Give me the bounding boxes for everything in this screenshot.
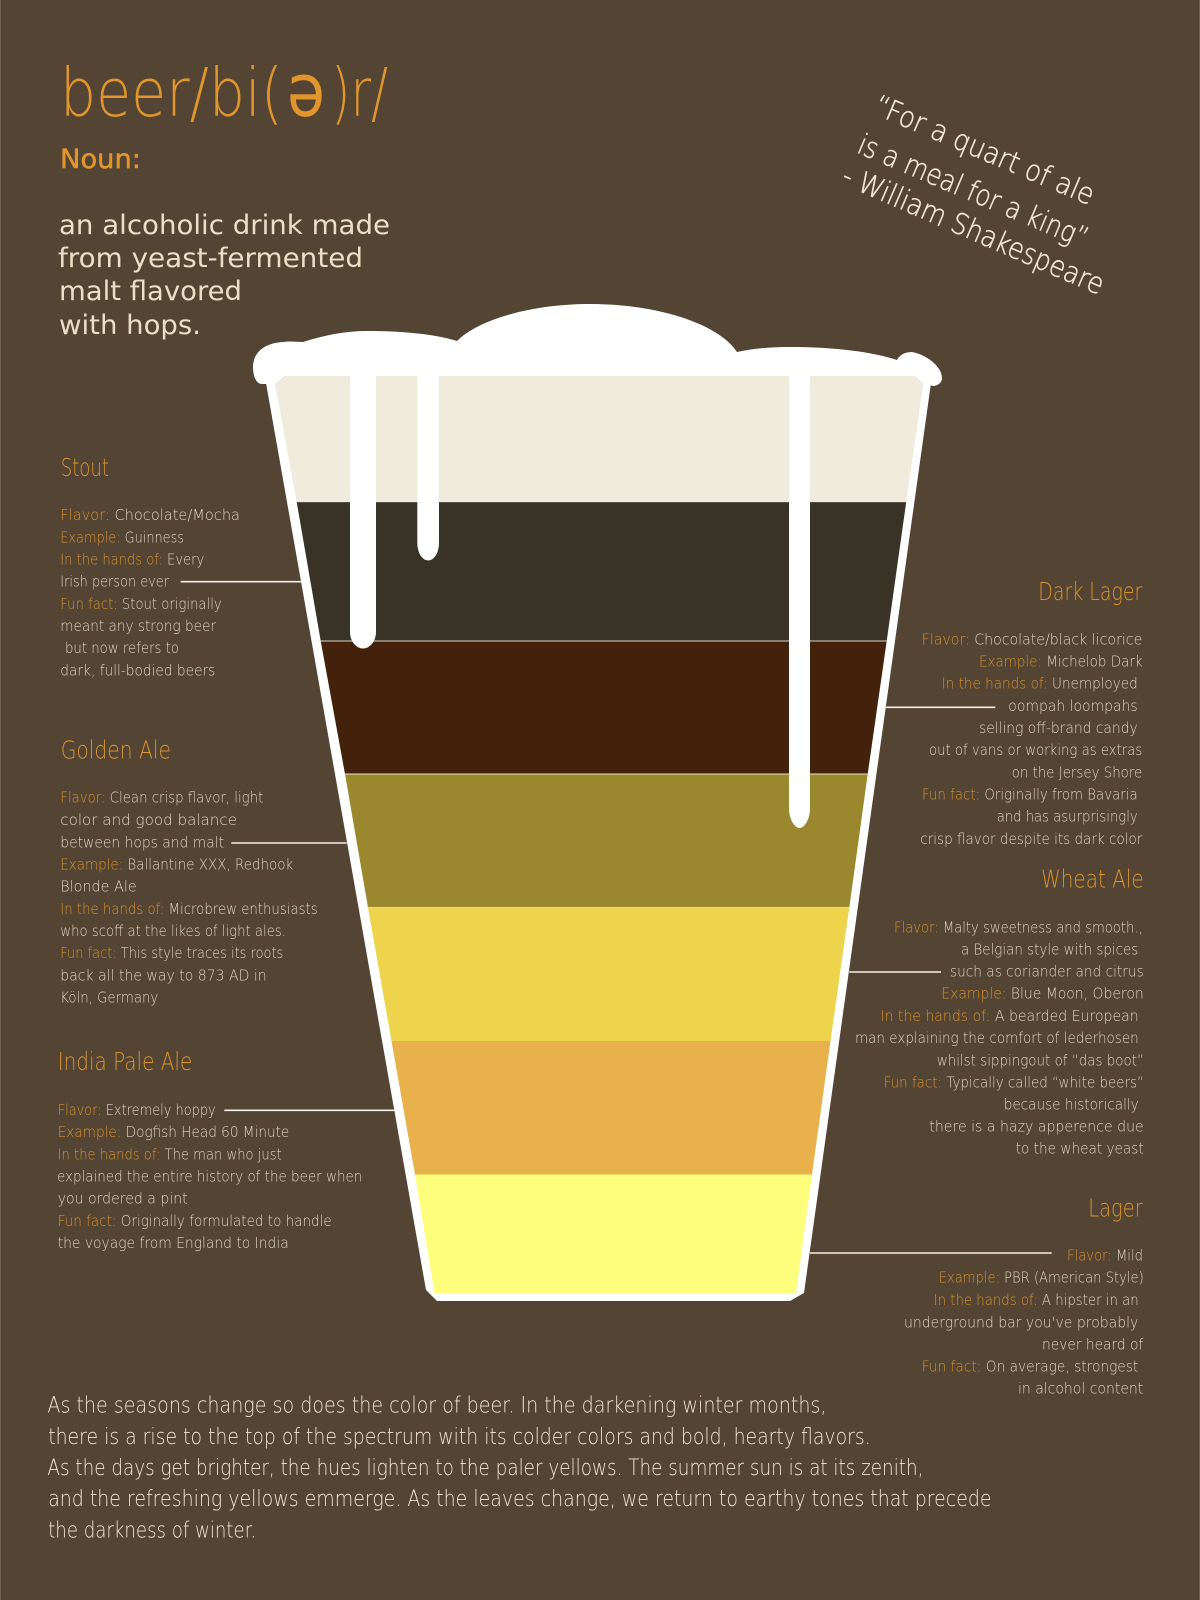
layer: dark lager	[321, 641, 887, 774]
quote: William Shakespeare: - William Shakespeare	[837, 158, 1110, 301]
text block: Dark Lager details: Flavor: Chocolate/black licorice	[922, 630, 1142, 648]
text block: Stout details: Example: Guinness	[60, 528, 184, 546]
text block: seasons paragraph: there is a rise to the top of the spectrum with its colder colors and bold, hearty flavors.	[48, 1425, 871, 1450]
text block: Wheat Ale details: Flavor: Malty sweetness and smooth.,	[894, 918, 1143, 936]
text block: Wheat Ale details: to the wheat yeast	[1016, 1140, 1144, 1158]
text block: seasons paragraph: As the days get brighter, the hues lighten to the paler yellows. The summer sun is at its zenith,	[47, 1456, 923, 1481]
text block: Golden Ale details: Fun fact: This style traces its roots	[60, 944, 283, 962]
text block: Lager details: never heard of	[1042, 1335, 1144, 1353]
panel: Wheat Ale	[849, 865, 1144, 1158]
title: beer pronunciation: beer/bi(	[60, 54, 283, 132]
text block: Wheat Ale details: man explaining the comfort of lederhosen	[855, 1029, 1139, 1047]
heading: Wheat Ale: Wheat Ale	[1041, 865, 1144, 894]
text block: Golden Ale details: Flavor: Clean crisp flavor, light	[60, 789, 263, 807]
leader line: Golden Ale	[231, 842, 347, 844]
text block: definition	[58, 210, 390, 341]
text block: Lager details: Fun fact: On average, strongest	[922, 1357, 1138, 1375]
title: beer pronunciation: )r/	[331, 54, 388, 132]
text block: seasons paragraph: the darkness of winter.	[48, 1518, 256, 1543]
text block: Stout details: dark, full-bodied beers	[60, 662, 215, 680]
heading: Dark Lager: Dark Lager	[1038, 577, 1143, 606]
glass outline	[266, 383, 931, 1301]
text block: Wheat Ale details: there is a hazy apperence due	[929, 1118, 1144, 1136]
text block: definition: an alcoholic drink made	[59, 210, 390, 241]
panel: Golden Ale	[60, 735, 347, 1006]
layer: lager	[415, 1174, 812, 1293]
foam head	[253, 304, 942, 386]
quote: William Shakespeare	[837, 88, 1110, 301]
quote: William Shakespeare: is a meal for a king”	[853, 127, 1094, 255]
panel: India Pale Ale	[57, 1047, 395, 1252]
text block: definition: from yeast-fermented	[58, 243, 363, 274]
text block: Wheat Ale details: a Belgian style with spices	[961, 940, 1138, 958]
leader line: Dark Lager	[886, 706, 995, 708]
text block: Dark Lager details: In the hands of: Unemployed	[942, 675, 1138, 693]
text block: Wheat Ale details: such as coriander and citrus	[950, 963, 1144, 981]
text block: Golden Ale details: Blonde Ale	[60, 878, 137, 896]
text block: seasons paragraph	[47, 1394, 992, 1543]
text block: Wheat Ale details	[855, 918, 1144, 1158]
text block: Stout details	[60, 506, 240, 680]
text block: India Pale Ale details: you ordered a pint	[58, 1190, 188, 1208]
text block: Golden Ale details: Example: Ballantine XXX, Redhook	[60, 856, 293, 874]
leader line: Stout	[181, 581, 302, 583]
quote: William Shakespeare: “For a quart of ale	[869, 88, 1100, 212]
layer: stout	[297, 502, 906, 641]
text block: Stout details: Flavor: Chocolate/Mocha	[60, 506, 240, 524]
text block: Stout details: Irish person ever	[60, 573, 170, 591]
text block: Golden Ale details: between hops and malt	[60, 833, 224, 851]
text block: India Pale Ale details	[57, 1101, 362, 1252]
text block: Dark Lager details: and has asurprisingly	[997, 808, 1138, 826]
foam drip: short	[417, 370, 439, 560]
text block: Dark Lager details	[920, 630, 1143, 848]
layer: golden ale	[345, 774, 868, 908]
text block: definition: with hops.	[59, 310, 201, 341]
text block: India Pale Ale details: Example: Dogfish Head 60 Minute	[58, 1123, 289, 1141]
panel: Stout	[60, 453, 302, 680]
text block: Lager details	[904, 1247, 1144, 1398]
text block: Golden Ale details: In the hands of: Microbrew enthusiasts	[60, 900, 318, 918]
text block: seasons paragraph: As the seasons change so does the color of beer. In the darkening winter months,	[47, 1394, 826, 1419]
text block: Dark Lager details: crisp flavor despite its dark color	[920, 830, 1143, 848]
text block: seasons paragraph: and the refreshing yellows emmerge. As the leaves change, we return to earthy tones that precede	[48, 1487, 992, 1512]
title: beer pronunciation: ə	[287, 48, 325, 134]
text block: India Pale Ale details: Flavor: Extremely hoppy	[58, 1101, 216, 1119]
text block: Dark Lager details: on the Jersey Shore	[1012, 763, 1142, 781]
foam drip: long left	[350, 370, 376, 648]
leader line: India Pale Ale	[224, 1109, 395, 1111]
heading: Noun: Noun:	[60, 144, 141, 175]
layer: wheat ale	[368, 908, 849, 1041]
text block: Wheat Ale details: because historically	[1004, 1095, 1139, 1113]
text block: Dark Lager details: Fun fact: Originally from Bavaria	[922, 786, 1138, 804]
text block: Wheat Ale details: Fun fact: Typically called “white beers”	[884, 1073, 1144, 1091]
layer: india pale ale	[392, 1041, 830, 1174]
text block: Wheat Ale details: In the hands of: A bearded European	[880, 1007, 1139, 1025]
text block: Golden Ale details	[60, 789, 318, 1006]
panel: Lager	[810, 1194, 1144, 1398]
text block: Stout details: meant any strong beer	[60, 617, 217, 635]
text block: Golden Ale details: Köln, Germany	[60, 988, 158, 1006]
text block: Dark Lager details: selling off-brand candy	[979, 719, 1138, 737]
heading: Stout: Stout	[61, 453, 109, 482]
panel: Dark Lager	[886, 577, 1143, 848]
text block: Lager details: underground bar you've probably	[904, 1313, 1138, 1331]
leader line: Wheat Ale	[849, 971, 941, 973]
text block: Golden Ale details: back all the way to 873 AD in	[60, 966, 267, 984]
heading: Lager: Lager	[1088, 1194, 1143, 1223]
text block: Lager details: Example: PBR (American Style)	[939, 1269, 1144, 1287]
text block: India Pale Ale details: In the hands of: The man who just	[58, 1145, 282, 1163]
heading: Golden Ale: Golden Ale	[61, 735, 171, 764]
text block: Stout details: but now refers to	[65, 639, 179, 657]
text block: definition: malt flavored	[59, 276, 242, 307]
text block: Dark Lager details: oompah loompahs	[1008, 697, 1138, 715]
beer glass illustration	[253, 304, 942, 1301]
text block: Wheat Ale details: Example: Blue Moon, Oberon	[941, 985, 1144, 1003]
text block: Golden Ale details: color and good balance	[60, 811, 237, 829]
text block: Stout details: Fun fact: Stout originally	[60, 595, 222, 613]
text block: Lager details: in alcohol content	[1018, 1380, 1143, 1398]
text block: Stout details: In the hands of: Every	[60, 550, 204, 568]
foam drip: long right	[789, 370, 810, 828]
text block: India Pale Ale details: Fun fact: Originally formulated to handle	[58, 1212, 332, 1230]
text block: Dark Lager details: Example: Michelob Dark	[979, 652, 1143, 670]
text block: Lager details: Flavor: Mild	[1067, 1247, 1143, 1265]
text block: Dark Lager details: out of vans or working as extras	[929, 741, 1142, 759]
layer: foam	[275, 376, 924, 502]
text block: Lager details: In the hands of: A hipster in an	[934, 1291, 1139, 1309]
leader line: Lager	[810, 1252, 1052, 1254]
text block: Wheat Ale details: whilst sippingout of “das boot”	[937, 1051, 1144, 1069]
text block: India Pale Ale details: explained the entire history of the beer when	[57, 1168, 362, 1186]
heading: India Pale Ale: India Pale Ale	[58, 1047, 192, 1076]
text block: India Pale Ale details: the voyage from England to India	[58, 1234, 289, 1252]
text block: Golden Ale details: who scoff at the likes of light ales.	[60, 922, 286, 940]
